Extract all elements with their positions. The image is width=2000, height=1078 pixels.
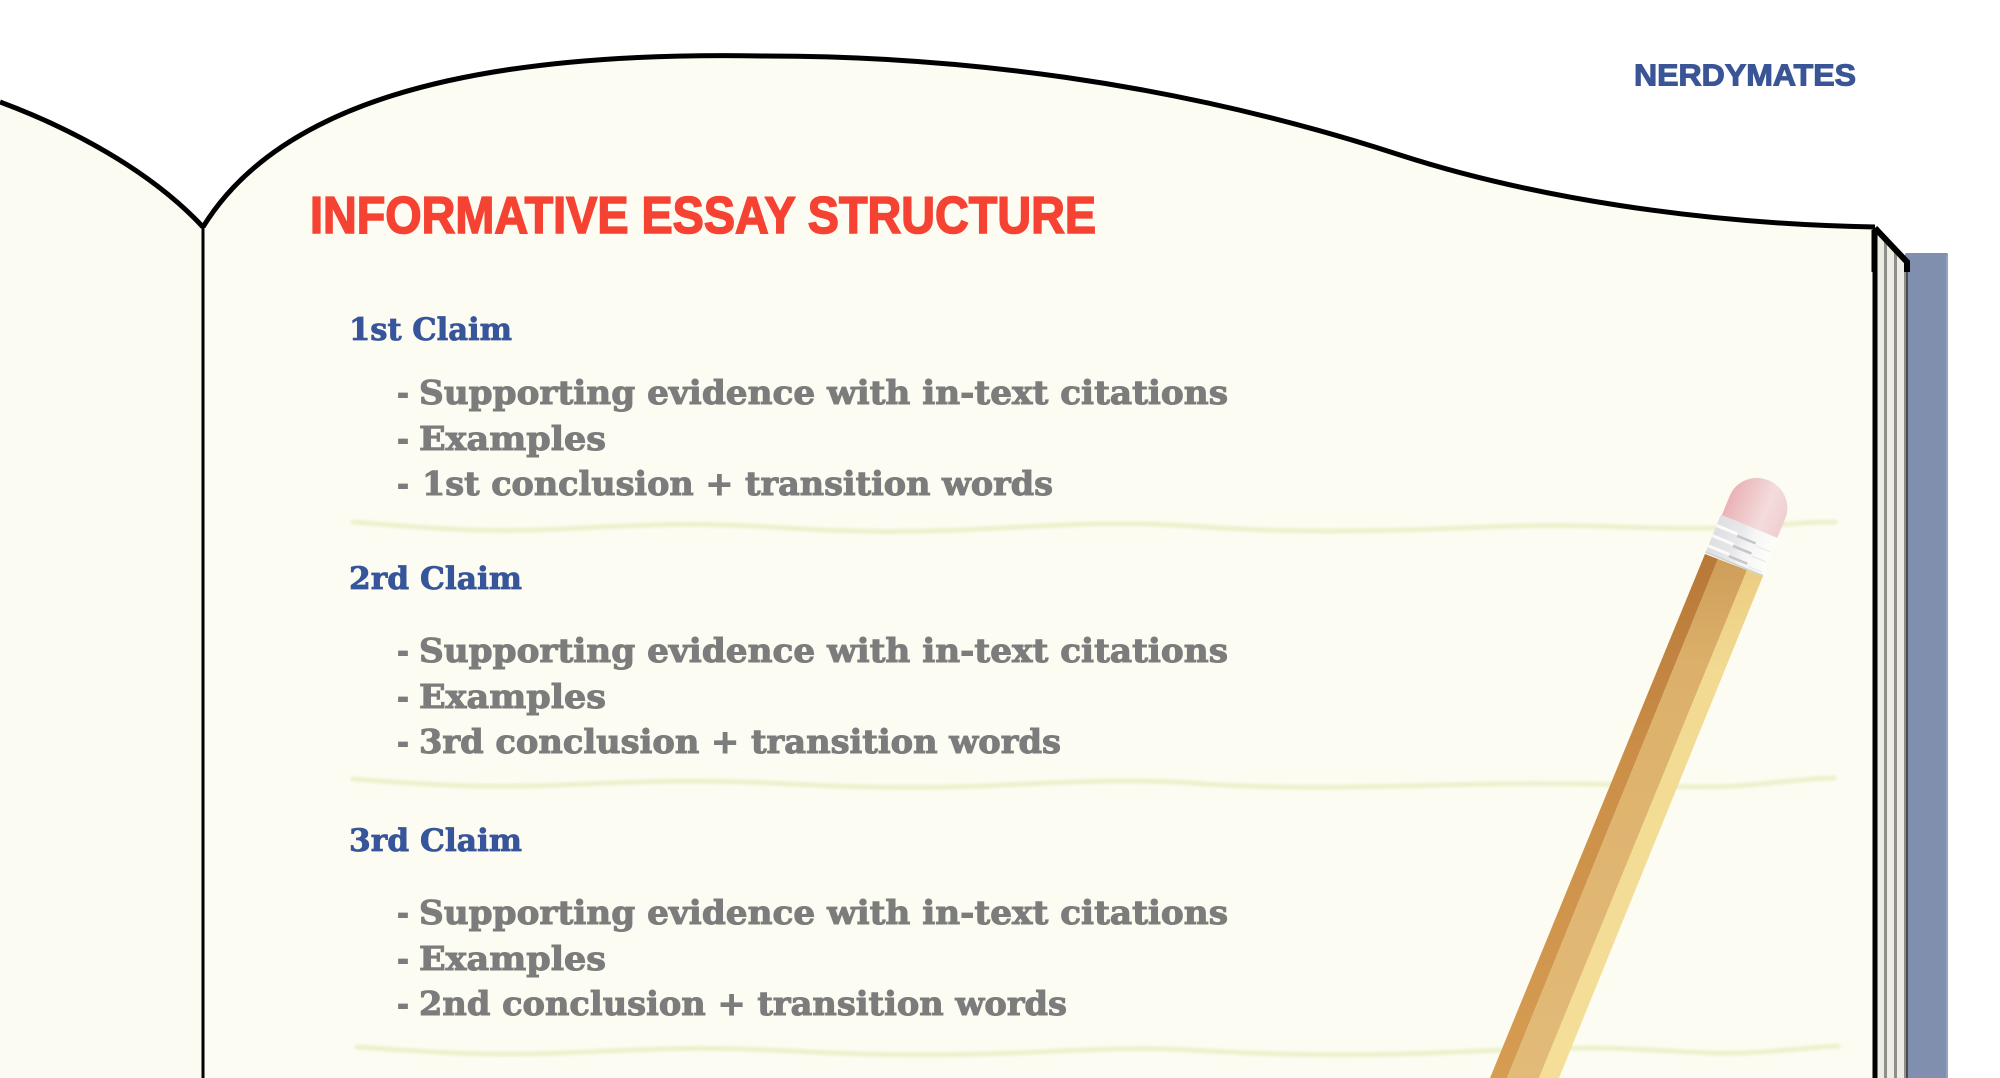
- list: 2rd claim points: Examples: [419, 677, 606, 716]
- section: 3rd claim: [349, 823, 1228, 1023]
- list: 1st claim points: -: [397, 373, 409, 412]
- pencil top: [1705, 469, 1797, 576]
- list: 2rd claim points: -: [397, 722, 409, 761]
- brand name: NERDYMATES: [1634, 58, 1856, 92]
- section: 1st claim: [349, 312, 1228, 503]
- icon: pencil: [1490, 469, 1797, 1078]
- list: 2rd claim points: 3rd conclusion + transition words: [419, 722, 1061, 761]
- list: 3rd claim points: [397, 893, 1228, 1023]
- section: 2nd claim: [349, 561, 1228, 761]
- right page: [203, 56, 1875, 1078]
- list: 1st claim points: [397, 373, 1228, 503]
- heading: 3rd claim: 3rd Claim: [349, 823, 522, 859]
- list: 3rd claim points: -: [397, 939, 409, 978]
- title: INFORMATIVE ESSAY STRUCTURE: [310, 187, 1096, 245]
- heading: 1st claim: 1st Claim: [349, 312, 512, 348]
- list: 3rd claim points: -: [397, 984, 409, 1023]
- left page: [0, 102, 203, 1078]
- list: 1st claim points: Examples: [419, 419, 606, 458]
- book cover: [1905, 253, 1948, 1078]
- page edges: [1875, 228, 1908, 1078]
- list: 2rd claim points: -: [397, 677, 409, 716]
- list: 3rd claim points: -: [397, 893, 409, 932]
- list: 2rd claim points: -: [397, 631, 409, 670]
- ruled line 1: [353, 522, 1835, 531]
- list: 1st claim points: Supporting evidence with in-text citations: [419, 373, 1228, 412]
- eraser: [1722, 469, 1796, 538]
- ruled line 3: [357, 1046, 1838, 1055]
- list: 3rd claim points: Examples: [419, 939, 606, 978]
- heading: 2rd claim: 2rd Claim: [349, 561, 522, 597]
- list: 2rd claim points: Supporting evidence with in-text citations: [419, 631, 1228, 670]
- ferrule: [1705, 515, 1778, 576]
- list: 3rd claim points: Supporting evidence with in-text citations: [419, 893, 1228, 932]
- list: 2rd claim points: [397, 631, 1228, 761]
- list: 1st claim points: 1st conclusion + transition words: [422, 464, 1053, 503]
- pencil body: [1490, 554, 1763, 1078]
- list: 3rd claim points: 2nd conclusion + transition words: [419, 984, 1067, 1023]
- list: 1st claim points: -: [397, 419, 409, 458]
- ruled line 2: [353, 778, 1834, 787]
- list: 1st claim points: -: [397, 464, 409, 503]
